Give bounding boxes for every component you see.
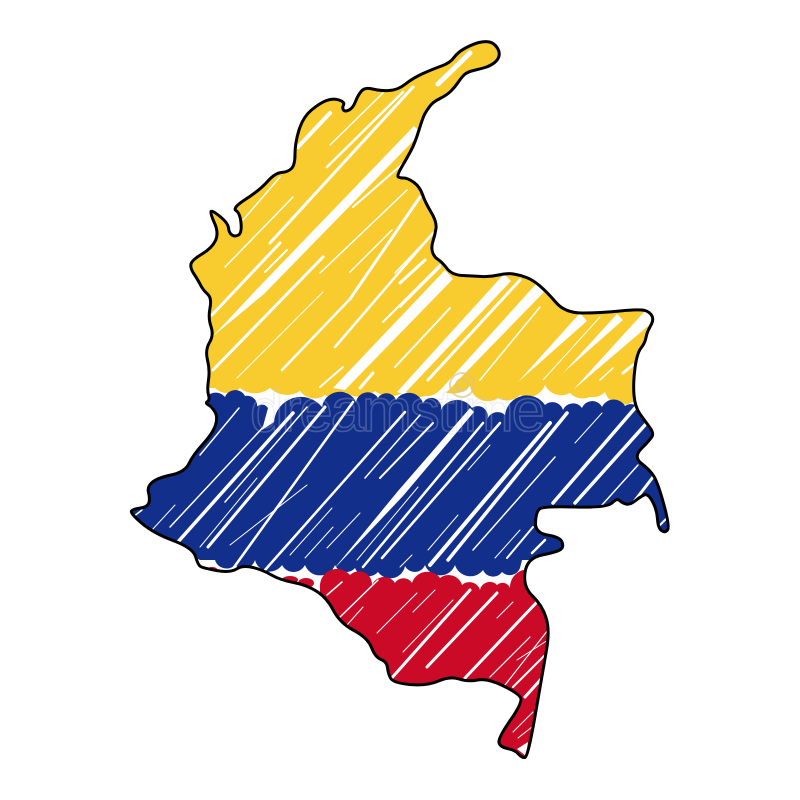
white scribble strokes: blue band <box>133 402 668 570</box>
white scribble strokes: red band <box>327 580 548 756</box>
infographic: Colombia flag scribble map <box>130 40 670 759</box>
white scribble strokes: yellow band <box>212 53 655 399</box>
watermark spiral <box>450 373 474 397</box>
stock watermark: dreamstime <box>250 377 545 444</box>
yellow band <box>192 43 650 405</box>
red band <box>320 568 547 756</box>
country outline <box>131 42 668 758</box>
blue band <box>120 390 700 578</box>
red flecks at the blue band edge <box>207 567 314 588</box>
map fill clipped to the country shape <box>132 43 667 756</box>
